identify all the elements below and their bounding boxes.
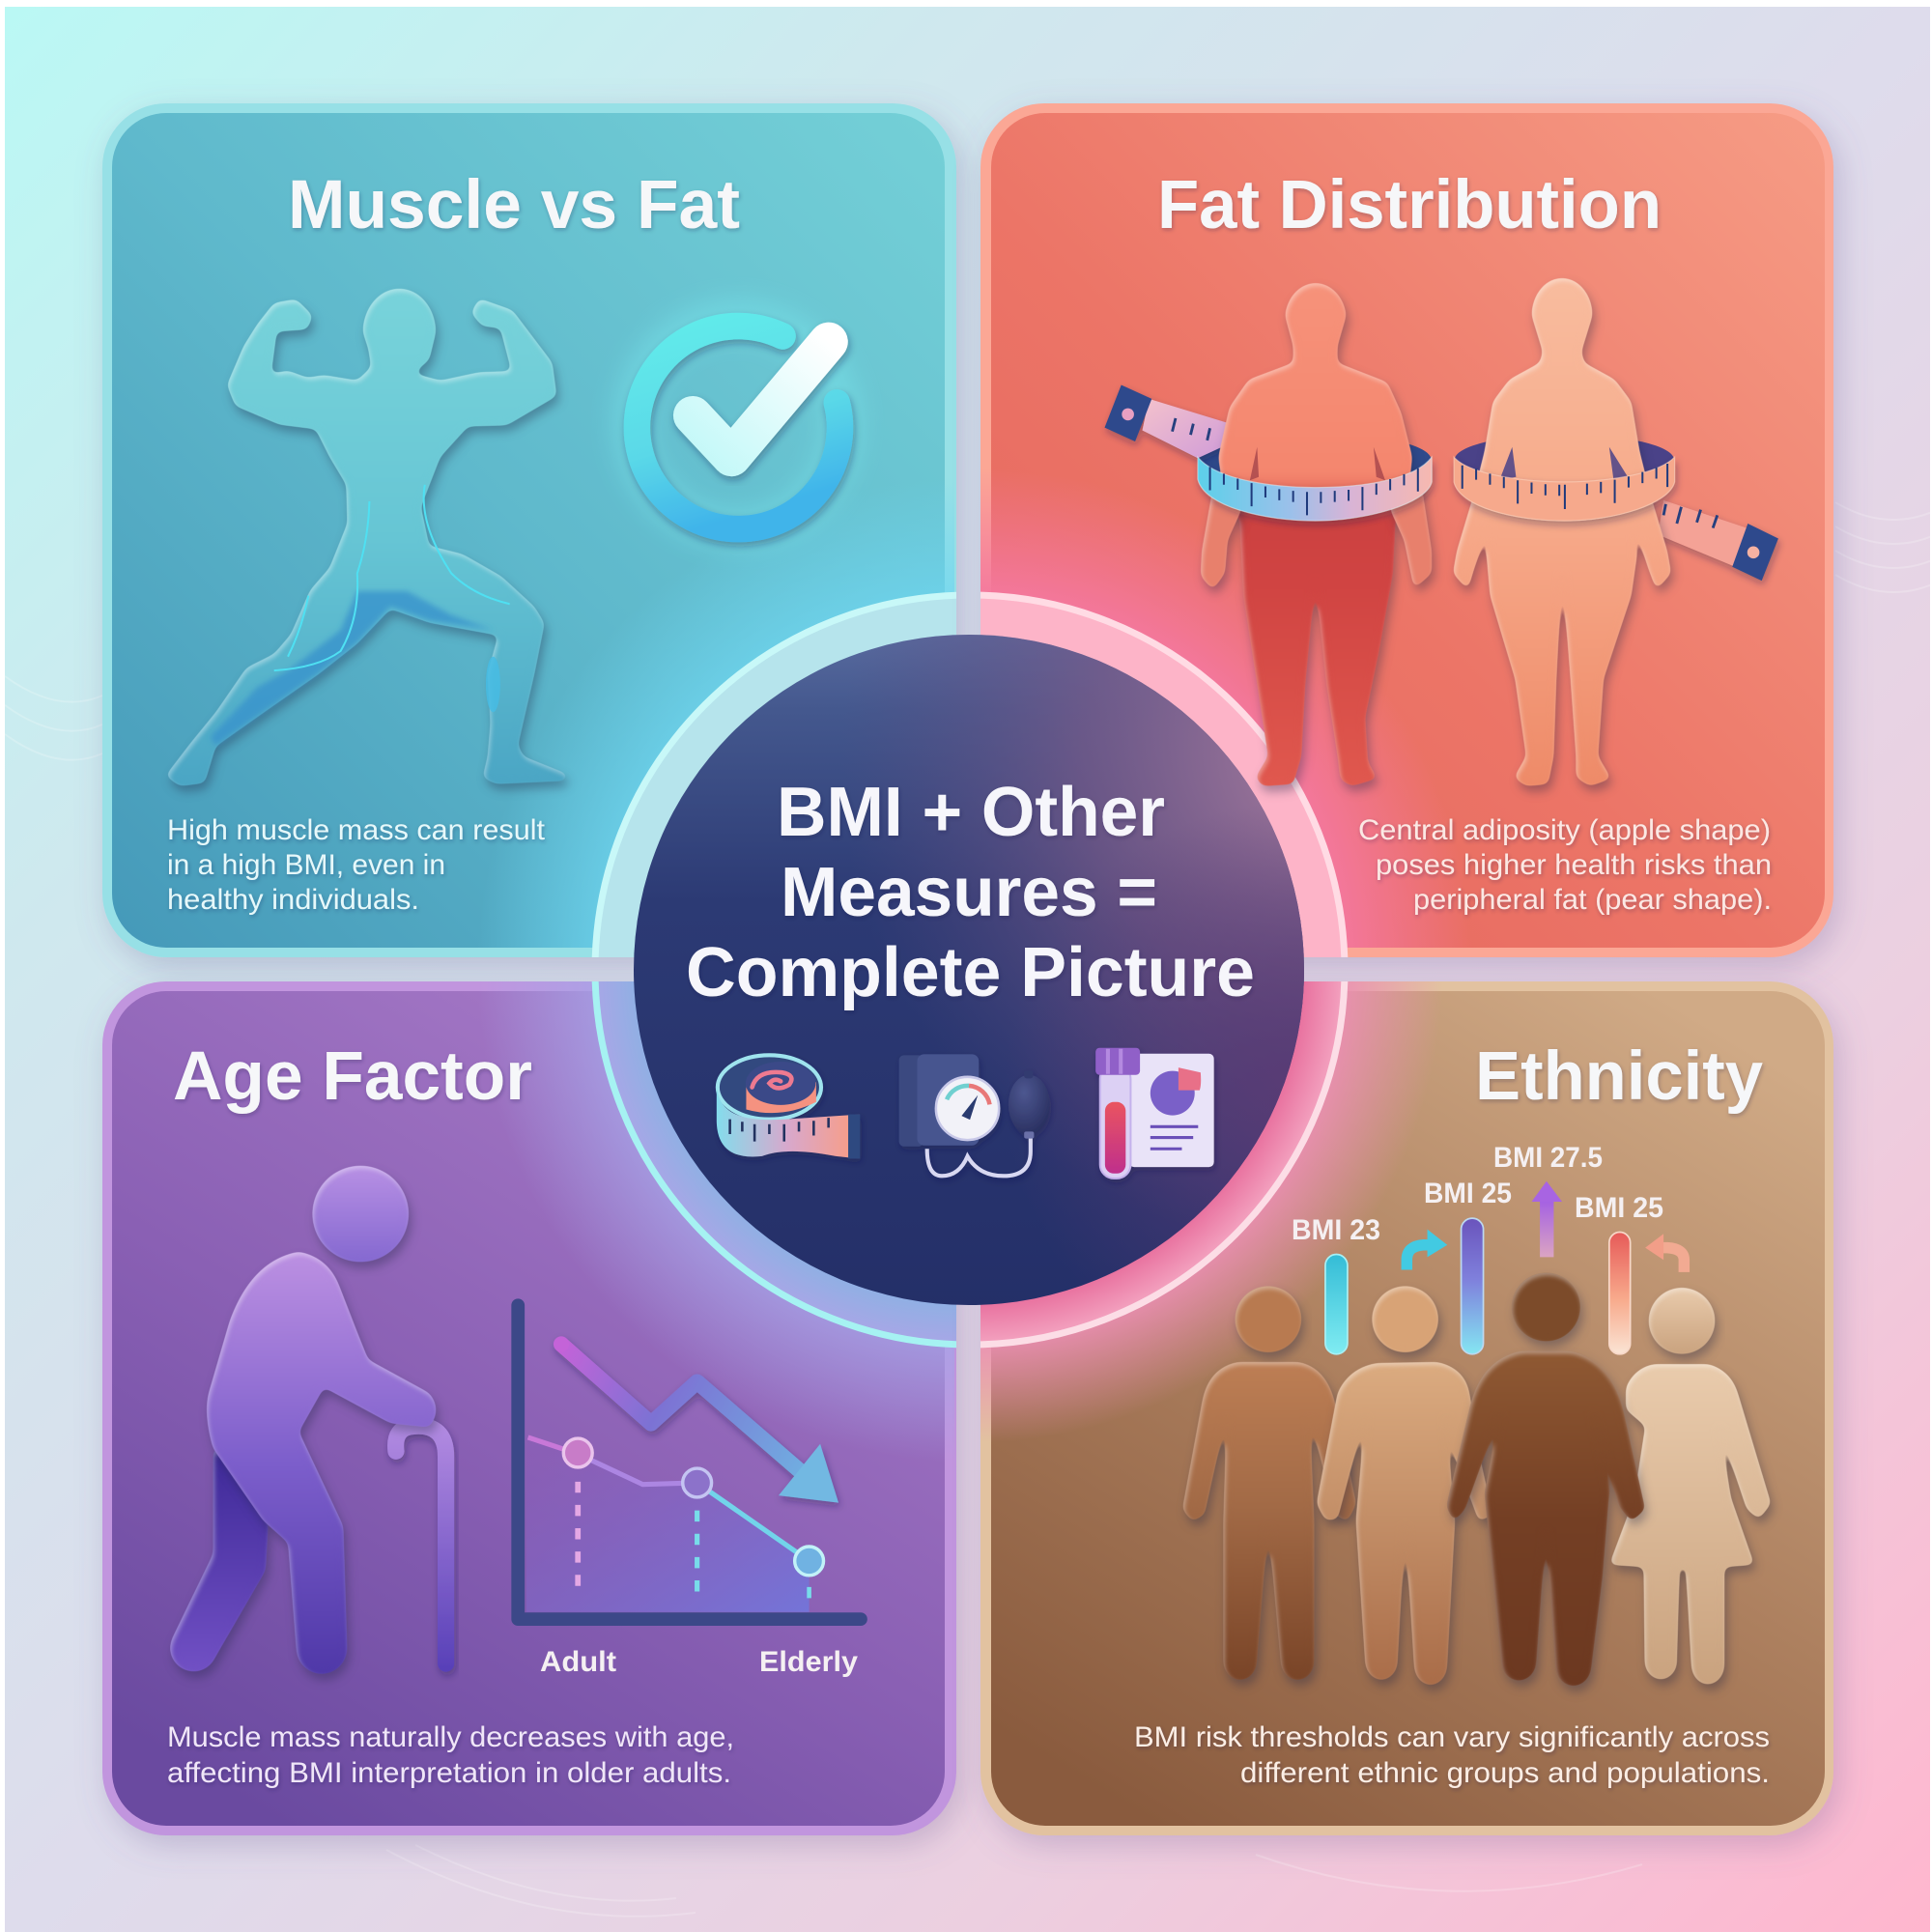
panel: fat distribution [974, 100, 1852, 978]
icon: measuring tape roll [717, 1055, 860, 1158]
center circle [628, 628, 1314, 1314]
icon: elderly figure with cane [170, 1166, 446, 1674]
icon: pear-shaped body with tape [1453, 278, 1778, 786]
text: muscle vs fat description [167, 814, 546, 916]
icon: four figures of different ethnic groups [1182, 1272, 1771, 1686]
icon: muscular figure [165, 289, 568, 786]
heading: muscle vs fat: Muscle vs Fat [288, 167, 740, 243]
text: fat distribution description: Central adiposity (apple shape) [1358, 814, 1771, 846]
text: fat distribution description [1358, 814, 1772, 916]
text: age factor description: affecting BMI interpretation in older adults. [167, 1757, 731, 1789]
label: adult: Adult [540, 1646, 616, 1678]
text: muscle vs fat description: healthy individuals. [167, 884, 419, 916]
text: muscle vs fat description: in a high BMI, even in [167, 849, 445, 881]
center title: Complete Picture [686, 934, 1255, 1011]
text: muscle vs fat description: High muscle mass can result [167, 814, 546, 846]
icon: test tube and report [1095, 1048, 1214, 1179]
center title [686, 774, 1255, 1011]
panel: age factor [96, 979, 974, 1858]
heading: age factor: Age Factor [173, 1038, 532, 1115]
center title: BMI + Other [777, 774, 1165, 851]
label: elderly: Elderly [759, 1646, 858, 1678]
icon: blood pressure monitor [899, 1054, 1050, 1176]
icon: apple-shaped body with tape [1105, 283, 1432, 786]
heading: ethnicity: Ethnicity [1475, 1038, 1764, 1115]
text: ethnicity description: different ethnic groups and populations. [1240, 1757, 1770, 1789]
text: fat distribution description: peripheral fat (pear shape). [1413, 884, 1772, 916]
text: fat distribution description: poses higher health risks than [1376, 849, 1772, 881]
label: BMI 23: BMI 23 [1292, 1214, 1380, 1246]
heading: fat distribution: Fat Distribution [1157, 167, 1662, 243]
label: BMI 27.5: BMI 27.5 [1493, 1142, 1603, 1174]
center title: Measures = [781, 854, 1157, 931]
text: age factor description [167, 1721, 734, 1789]
label: BMI 25 left: BMI 25 [1424, 1178, 1512, 1209]
panel: ethnicity [976, 980, 1852, 1858]
text: ethnicity description: BMI risk thresholds can vary significantly across [1134, 1721, 1770, 1753]
text: age factor description: Muscle mass naturally decreases with age, [167, 1721, 734, 1753]
chart: muscle mass decline [518, 1305, 861, 1619]
icon: check mark in ring [632, 319, 842, 529]
panel: muscle vs fat [95, 100, 975, 980]
icon: threshold bars and arrows [1325, 1181, 1684, 1354]
text: ethnicity description [1134, 1721, 1770, 1789]
label: BMI 25 right: BMI 25 [1575, 1192, 1663, 1224]
